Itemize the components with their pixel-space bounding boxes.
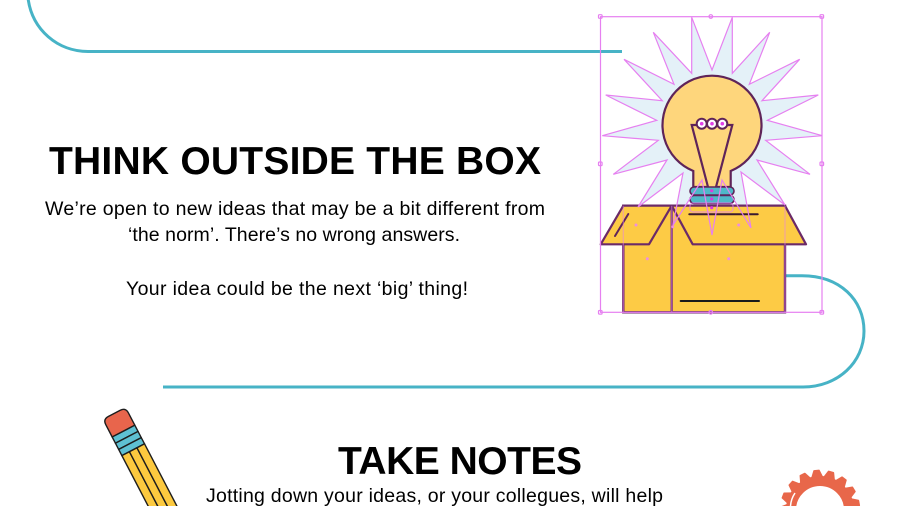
box left flap	[601, 206, 672, 244]
gear ring	[791, 481, 849, 506]
icon: pencil	[103, 407, 186, 506]
pencil eraser	[103, 407, 135, 437]
box centre edge	[671, 206, 673, 312]
pencil ferrule	[112, 425, 145, 456]
anchor points	[634, 189, 740, 260]
bulb socket	[690, 187, 734, 204]
gear highlight	[790, 493, 795, 506]
selection outline overlay	[598, 15, 824, 314]
pencil body	[122, 444, 186, 506]
connector: right teal curve	[163, 276, 864, 387]
box right flap	[672, 206, 806, 244]
starburst fill	[602, 17, 822, 235]
coil centres	[700, 122, 724, 125]
text block: new ideas: Your idea could be the next ‘big’ thing!	[126, 278, 468, 300]
connector: top teal curve	[28, 0, 622, 52]
heading: think outside the box: THINK OUTSIDE THE BOX	[49, 140, 541, 183]
text block: new ideas	[45, 198, 545, 300]
heading: take notes: TAKE NOTES	[338, 440, 582, 483]
icon: gear	[780, 470, 860, 506]
icon: light bulb in a box	[598, 15, 824, 314]
box detail lines	[615, 214, 759, 301]
text block: new ideas: We’re open to new ideas that may be a bit different from	[45, 198, 545, 220]
text block: new ideas: ‘the norm’. There’s no wrong answers.	[128, 224, 460, 246]
filament coils	[697, 119, 727, 129]
gear teeth	[780, 470, 860, 506]
box body	[623, 206, 785, 312]
filament	[692, 125, 732, 187]
bulb glass	[662, 76, 762, 187]
